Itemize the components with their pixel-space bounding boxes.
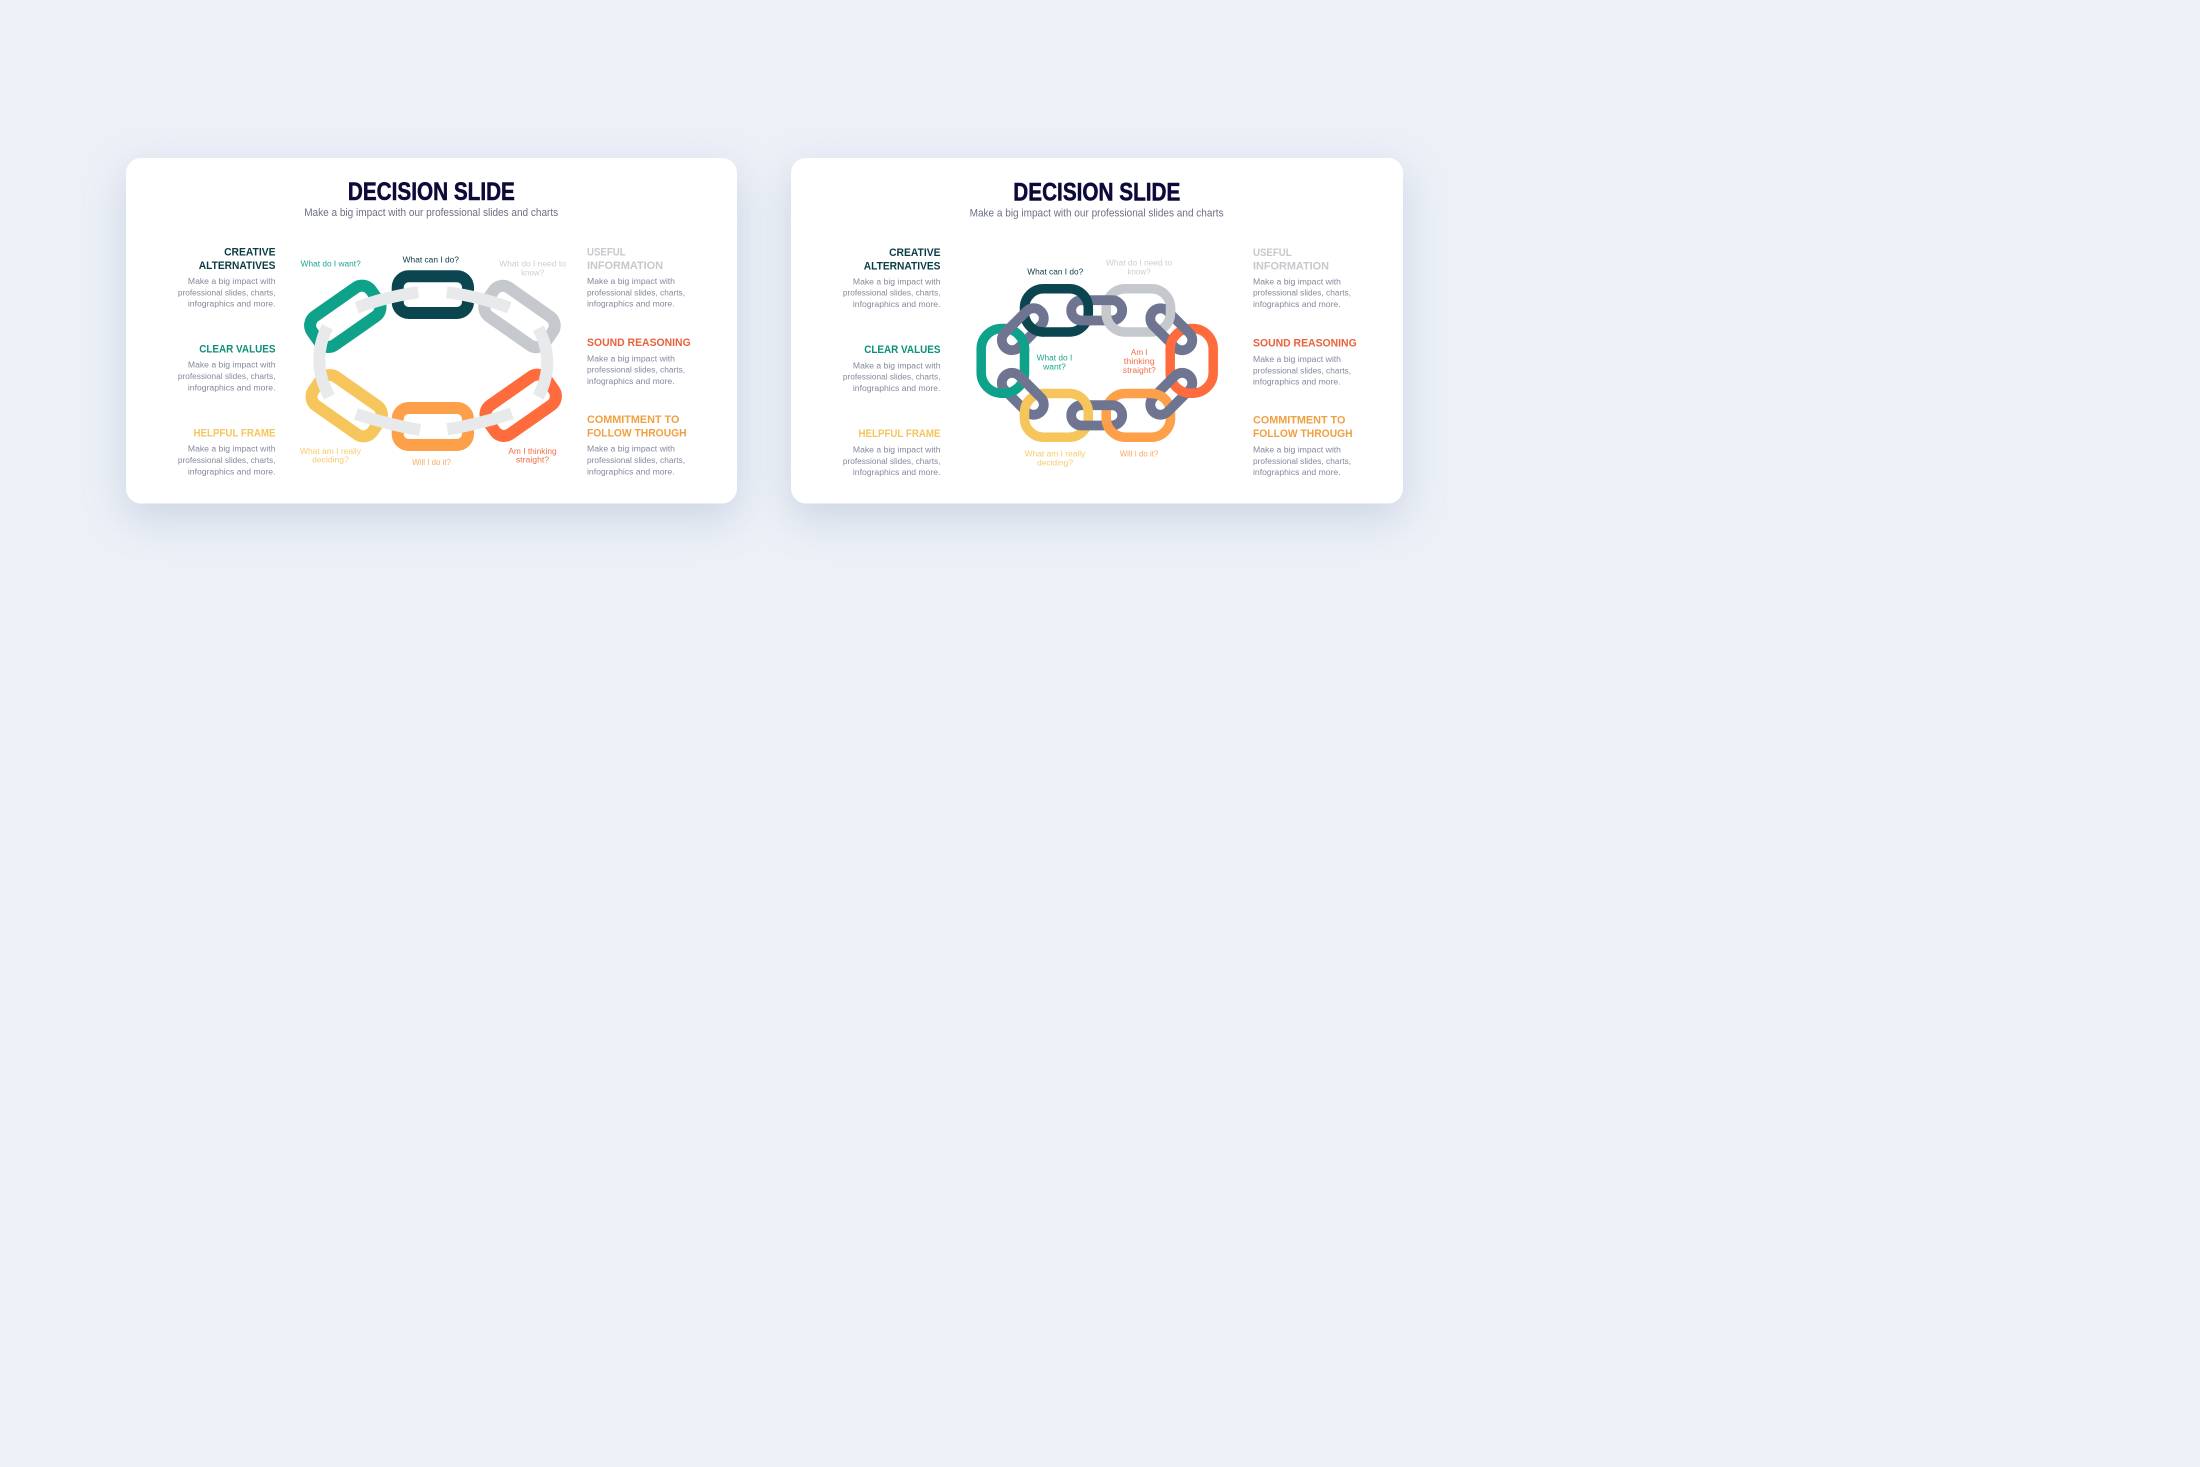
text block: helpful frame: infographics and more. (188, 467, 276, 476)
text block: helpful frame: professional slides, charts, (178, 456, 276, 465)
text block: creative alternatives: professional slides, charts, (843, 289, 940, 298)
text block: creative alternatives: CREATIVE (224, 247, 276, 259)
panel: right decision slide (791, 158, 1403, 504)
text block: clear values: Make a big impact with (188, 361, 276, 370)
text block: creative alternatives (178, 247, 276, 309)
text block: sound reasoning: infographics and more. (587, 377, 675, 386)
text block: helpful frame (843, 428, 940, 477)
text block: creative alternatives: infographics and more. (188, 300, 276, 309)
diagram labels: What do I need to (499, 260, 567, 269)
diagram labels: deciding? (312, 456, 349, 465)
text block: sound reasoning: professional slides, charts, (1253, 366, 1351, 375)
text block: clear values: professional slides, charts, (843, 373, 940, 382)
text block: creative alternatives: professional slides, charts, (178, 288, 276, 297)
text block: creative alternatives: CREATIVE (889, 247, 940, 259)
text block: useful information: professional slides, charts, (1253, 289, 1351, 298)
diagram labels: straight? (516, 456, 550, 465)
link overlaps woven above connectors (998, 290, 1196, 436)
diagram labels: What do I want? (301, 260, 361, 269)
link: gray (1106, 289, 1170, 332)
text block: useful information: USEFUL (1253, 247, 1292, 259)
diagram labels: What can I do? (1027, 267, 1084, 276)
text block: helpful frame: Make a big impact with (188, 445, 276, 454)
diagram labels: deciding? (1037, 459, 1074, 468)
text block: useful information: Make a big impact with (587, 277, 675, 286)
diagram labels: What can I do? (403, 255, 460, 264)
subtitle: Make a big impact with our professional slides and charts (304, 207, 559, 219)
text block: helpful frame: HELPFUL FRAME (194, 427, 276, 439)
diagram labels (300, 255, 567, 467)
text block: clear values: CLEAR VALUES (199, 343, 276, 355)
text block: helpful frame (178, 427, 276, 476)
text block: commitment to follow through: infographics and more. (1253, 468, 1341, 477)
text block: clear values (178, 343, 276, 392)
link: dark (398, 276, 468, 313)
connectors (319, 292, 547, 430)
link: teal (981, 328, 1024, 393)
text block: commitment to follow through (1253, 415, 1353, 477)
link: orange (398, 408, 468, 445)
diagram labels: What am I really (300, 447, 361, 456)
diagram labels: Am I thinking (508, 447, 557, 456)
diagram labels: What do I (1037, 354, 1072, 363)
link: yellow (1024, 394, 1088, 437)
chain diagram: interlocked links (981, 289, 1213, 437)
text block: sound reasoning (587, 337, 691, 386)
text block: useful information (1253, 247, 1351, 309)
text block: commitment to follow through: FOLLOW THROUGH (587, 427, 687, 439)
subtitle: Make a big impact with our professional slides and charts (970, 207, 1224, 219)
chain diagram: flat links (306, 276, 560, 445)
link: orange (1106, 394, 1170, 437)
text block: commitment to follow through: FOLLOW THROUGH (1253, 428, 1353, 440)
text block: clear values: Make a big impact with (853, 361, 940, 370)
text block: clear values: professional slides, charts, (178, 372, 276, 381)
link: yellow (307, 371, 386, 441)
link: teal (306, 281, 385, 351)
text block: helpful frame: HELPFUL FRAME (858, 428, 940, 440)
diagram labels: Will I do it? (1120, 450, 1159, 459)
text block: sound reasoning: SOUND REASONING (587, 337, 691, 349)
text block: helpful frame: professional slides, charts, (843, 457, 940, 466)
text block: creative alternatives: ALTERNATIVES (864, 260, 940, 272)
title: DECISION SLIDE (348, 178, 515, 206)
text block: clear values: infographics and more. (853, 384, 940, 393)
text block: clear values: infographics and more. (188, 383, 276, 392)
text block: commitment to follow through: COMMITMENT TO (1253, 415, 1346, 427)
title: DECISION SLIDE (1013, 178, 1180, 206)
diagram labels: straight? (1123, 366, 1156, 375)
text block: helpful frame: Make a big impact with (853, 446, 940, 454)
text block: useful information: INFORMATION (587, 260, 663, 272)
diagram labels (1025, 259, 1173, 468)
diagram labels: know? (1128, 268, 1151, 277)
diagram labels: thinking (1124, 357, 1155, 366)
link: dark (1024, 289, 1088, 332)
text block: commitment to follow through: professional slides, charts, (1253, 457, 1351, 466)
text block: commitment to follow through: professional slides, charts, (587, 456, 685, 465)
text block: commitment to follow through (587, 414, 687, 476)
link: red (481, 370, 560, 440)
diagram labels: What am I really (1025, 450, 1085, 459)
panel: left decision slide (126, 158, 737, 504)
text block: sound reasoning: Make a big impact with (1253, 355, 1341, 364)
diagram labels: want? (1042, 363, 1066, 372)
diagram labels: What do I need to (1106, 259, 1173, 268)
text block: commitment to follow through: infographics and more. (587, 467, 675, 476)
text block: useful information: infographics and more. (587, 300, 675, 309)
text block: useful information: INFORMATION (1253, 260, 1329, 272)
card background (126, 158, 737, 504)
text block: commitment to follow through: COMMITMENT TO (587, 414, 680, 426)
text block: clear values (843, 344, 940, 393)
text block: sound reasoning: Make a big impact with (587, 354, 675, 363)
text block: helpful frame: infographics and more. (853, 468, 940, 477)
diagram labels: Am I (1131, 348, 1148, 357)
text block: creative alternatives: ALTERNATIVES (199, 260, 276, 272)
card background (791, 158, 1403, 504)
diagram labels: Will I do it? (412, 458, 451, 467)
text block: useful information: USEFUL (587, 247, 626, 259)
text block: sound reasoning: SOUND REASONING (1253, 338, 1357, 350)
text block: commitment to follow through: Make a big impact with (587, 445, 675, 454)
diagram labels: know? (521, 269, 545, 278)
text block: sound reasoning (1253, 338, 1357, 387)
text block: clear values: CLEAR VALUES (864, 344, 940, 356)
text block: useful information: Make a big impact with (1253, 277, 1341, 286)
text block: creative alternatives: Make a big impact with (853, 277, 940, 286)
text block: creative alternatives: infographics and more. (853, 300, 940, 309)
text block: commitment to follow through: Make a big impact with (1253, 446, 1341, 454)
text block: sound reasoning: infographics and more. (1253, 378, 1341, 387)
text block: useful information: professional slides, charts, (587, 288, 685, 297)
text block: useful information (587, 247, 685, 309)
text block: sound reasoning: professional slides, charts, (587, 366, 685, 375)
link: gray (480, 282, 559, 351)
link: red (1170, 328, 1213, 393)
text block: useful information: infographics and more. (1253, 300, 1341, 309)
slate connector links (998, 300, 1197, 426)
text block: creative alternatives (843, 247, 940, 309)
text block: creative alternatives: Make a big impact with (188, 277, 276, 286)
